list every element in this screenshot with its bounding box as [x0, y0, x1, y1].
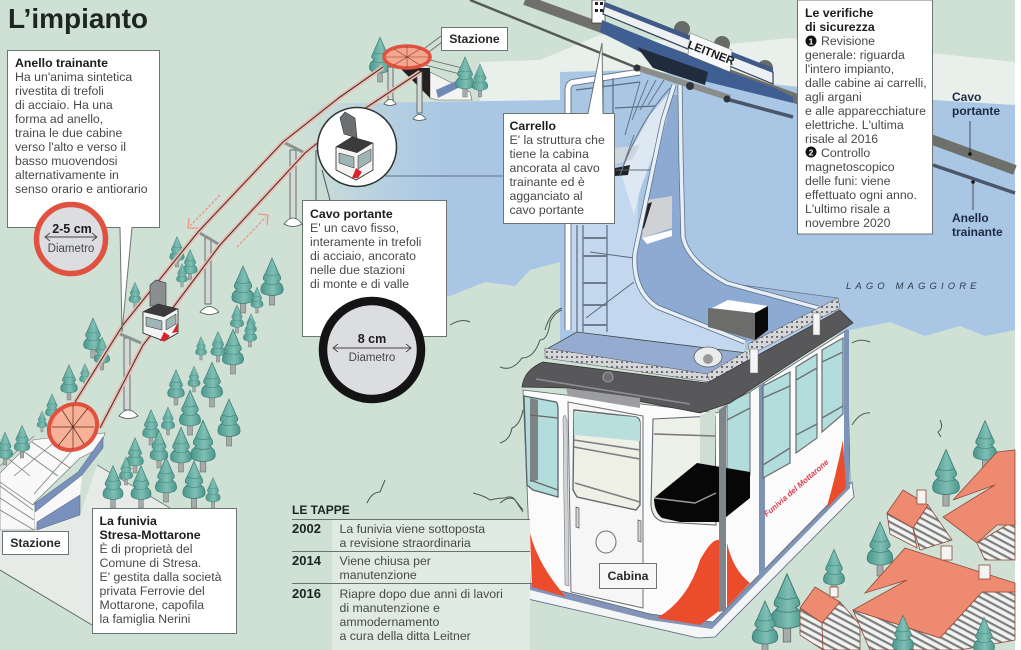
panel: funivia stresa-mottarone	[92, 508, 236, 634]
panel: anello trainante: basso muovendosi	[15, 154, 118, 168]
panel: verifiche di sicurezza: Controllo	[821, 146, 870, 160]
panel: cavo portante: nelle due stazioni	[310, 263, 405, 277]
icon: cavo diameter: Diametro	[349, 352, 395, 364]
bottom station	[0, 433, 170, 625]
title: L’impianto	[8, 3, 148, 34]
cables	[75, 67, 420, 428]
panel: carrello: cavo portante	[510, 203, 584, 217]
timeline: le tappe: Riapre dopo due anni di lavori	[340, 587, 503, 601]
panel: funivia stresa-mottarone: E' gestita dalla società	[100, 570, 222, 584]
panel: anello trainante: forma ad anello,	[15, 112, 103, 126]
icon: anello diameter	[36, 204, 106, 274]
label: cabina: Cabina	[608, 569, 649, 583]
seat window	[651, 416, 716, 525]
small roof	[887, 490, 928, 528]
timeline: le tappe: di manutenzione e	[340, 601, 440, 615]
panel: carrello: E' la struttura che	[510, 133, 605, 147]
icon: cavo diameter	[323, 301, 421, 399]
roof wheel	[694, 347, 722, 367]
panel: cavo portante	[302, 200, 446, 336]
panel: funivia stresa-mottarone: privata Ferrovie del	[100, 584, 205, 598]
station trees	[369, 37, 488, 97]
icon: anello diameter: 2-5 cm	[52, 222, 92, 236]
label: cavo portante: portante	[952, 104, 1000, 118]
foreground trees	[892, 615, 995, 650]
red panels	[530, 533, 566, 597]
panel: anello trainante: rivestita di trefoli	[15, 84, 104, 98]
label: cabina	[600, 564, 656, 588]
houses	[800, 450, 1015, 650]
house walls	[887, 513, 917, 548]
timeline: le tappe: 2014	[292, 553, 322, 568]
panel: funivia stresa-mottarone: la famiglia Nerini	[100, 612, 190, 626]
timeline: le tappe: a revisione straordinaria	[340, 536, 471, 550]
label: stazione (monte)	[442, 28, 508, 50]
panel: verifiche di sicurezza: agli argani	[805, 90, 862, 104]
carriage	[592, 0, 793, 103]
panel: funivia stresa-mottarone: La funivia	[100, 514, 157, 528]
panel: carrello: trainante ed è	[510, 175, 585, 189]
panel: verifiche di sicurezza: di sicurezza	[805, 20, 875, 34]
panel: anello trainante: senso orario e antiorario	[15, 182, 148, 196]
timeline: le tappe: 2002	[292, 521, 321, 536]
panel: verifiche di sicurezza: e alle apparecchiature	[805, 104, 926, 118]
panel: anello trainante: verso l'alto e verso il	[15, 140, 126, 154]
top big roof	[943, 450, 1015, 543]
panel: funivia stresa-mottarone: Stresa-Mottarone	[100, 528, 201, 542]
panel: cavo portante: Cavo portante	[310, 207, 393, 221]
chimneys	[917, 490, 926, 504]
hanger: frame and ladder	[568, 72, 818, 342]
panel: verifiche di sicurezza: risale al 2016	[805, 132, 878, 146]
label: anello trainante: Anello	[952, 211, 989, 225]
bottom drive wheel	[40, 395, 106, 459]
corner posts	[719, 405, 726, 612]
magnifier: gondola detail	[316, 108, 396, 200]
panel: funivia stresa-mottarone: È di proprietà del	[100, 541, 192, 556]
panel: verifiche di sicurezza: dalle cabine ai carrelli,	[805, 76, 927, 90]
panel: verifiche di sicurezza: elettriche. L'ultima	[805, 118, 904, 132]
timeline: le tappe: a cura della ditta Leitner	[340, 629, 471, 643]
panel: anello trainante	[8, 50, 160, 332]
panel: funivia stresa-mottarone: Mottarone, capofila	[100, 598, 204, 612]
equipment box	[708, 308, 755, 340]
lake	[300, 70, 1015, 350]
panel: verifiche di sicurezza: 2	[809, 148, 814, 158]
side windows	[727, 392, 750, 475]
railings	[545, 348, 710, 382]
timeline: le tappe: LE TAPPE	[292, 503, 350, 517]
panel: cavo portante: interamente in trefoli	[310, 235, 421, 249]
panel: verifiche di sicurezza: l'intero impianto,	[805, 62, 894, 76]
right valley trees	[752, 421, 997, 650]
panel: anello trainante: traina le due cabine	[15, 126, 122, 140]
label: anello trainante	[952, 180, 1003, 239]
panel: anello trainante: alternativamente in	[15, 168, 119, 182]
direction arrows	[188, 195, 268, 247]
timeline: le tappe: 2016	[292, 586, 321, 601]
panel: anello trainante: Ha un'anima sintetica	[15, 70, 132, 84]
panel: carrello: agganciato al	[510, 189, 583, 203]
cabin	[522, 298, 854, 638]
label: anello trainante: trainante	[952, 225, 1003, 239]
label: stazione (valle)	[2, 532, 68, 554]
top drive wheel	[384, 46, 430, 68]
label: cavo portante: Cavo	[952, 90, 981, 104]
roof	[522, 310, 853, 413]
cabin writing: Funivia del Mottarone	[762, 457, 831, 519]
timeline: le tappe: Viene chiusa per	[340, 554, 431, 568]
black seat	[654, 463, 750, 522]
timeline: le tappe: ammodernamento	[340, 615, 439, 629]
label: cavo portante	[952, 90, 1000, 156]
panel: verifiche di sicurezza: L'ultimo risale a	[805, 202, 890, 216]
timeline: le tappe: La funivia viene sottoposta	[340, 522, 485, 536]
cables in foreground	[470, 0, 1015, 193]
timeline: le tappe	[292, 503, 530, 650]
label: stazione (valle): Stazione	[10, 536, 61, 550]
panel: verifiche di sicurezza: magnetoscopico	[805, 160, 895, 174]
panel: verifiche di sicurezza: novembre 2020	[805, 216, 891, 230]
panel: cavo portante: di monte e di valle	[310, 277, 409, 291]
lake name: LAGO MAGGIORE	[846, 281, 981, 292]
white page edge	[1015, 0, 1021, 650]
panel: carrello: ancorata al cavo	[510, 161, 600, 175]
icon: anello diameter: Diametro	[48, 243, 94, 255]
sky clouds	[480, 35, 1015, 110]
panel: carrello: tiene la cabina	[510, 147, 589, 161]
connector line	[385, 175, 503, 177]
base plate	[524, 482, 854, 638]
panel: verifiche di sicurezza: Le verifiche	[805, 6, 874, 20]
panel: verifiche di sicurezza: delle funi: viene	[805, 174, 891, 188]
left window	[524, 396, 558, 497]
big roof	[853, 548, 1015, 638]
panel: anello trainante: Anello trainante	[15, 56, 108, 70]
panel: verifiche di sicurezza	[798, 0, 932, 234]
hanger: background panels	[568, 85, 838, 352]
timeline: le tappe: manutenzione	[340, 568, 417, 582]
icon: cavo diameter: 8 cm	[358, 332, 386, 346]
body	[523, 330, 850, 622]
roof platform	[545, 332, 747, 378]
panel: funivia stresa-mottarone: Comune di Stresa.	[100, 556, 201, 570]
label: stazione (monte): Stazione	[449, 32, 500, 46]
top station	[400, 36, 472, 100]
panel: verifiche di sicurezza: 1	[809, 36, 814, 46]
panel: carrello	[504, 43, 614, 224]
small gondola on the line	[143, 280, 178, 341]
panel: verifiche di sicurezza: generale: riguarda	[805, 48, 905, 62]
left forest	[0, 236, 283, 508]
panel: verifiche di sicurezza: effettuato ogni anno.	[805, 188, 917, 202]
panel: cavo portante: E' un cavo fisso,	[310, 221, 399, 235]
LEITNER label: LEITNER	[686, 39, 737, 68]
forest outlines	[367, 308, 942, 512]
door	[568, 402, 643, 608]
lower small roof	[800, 587, 840, 623]
pylons	[118, 67, 426, 418]
panel: verifiche di sicurezza: Revisione	[821, 34, 875, 48]
panel: cavo portante: di acciaio, ancorato	[310, 249, 416, 263]
panel: carrello: Carrello	[510, 119, 556, 133]
panel: anello trainante: di acciaio. Ha una	[15, 98, 113, 112]
